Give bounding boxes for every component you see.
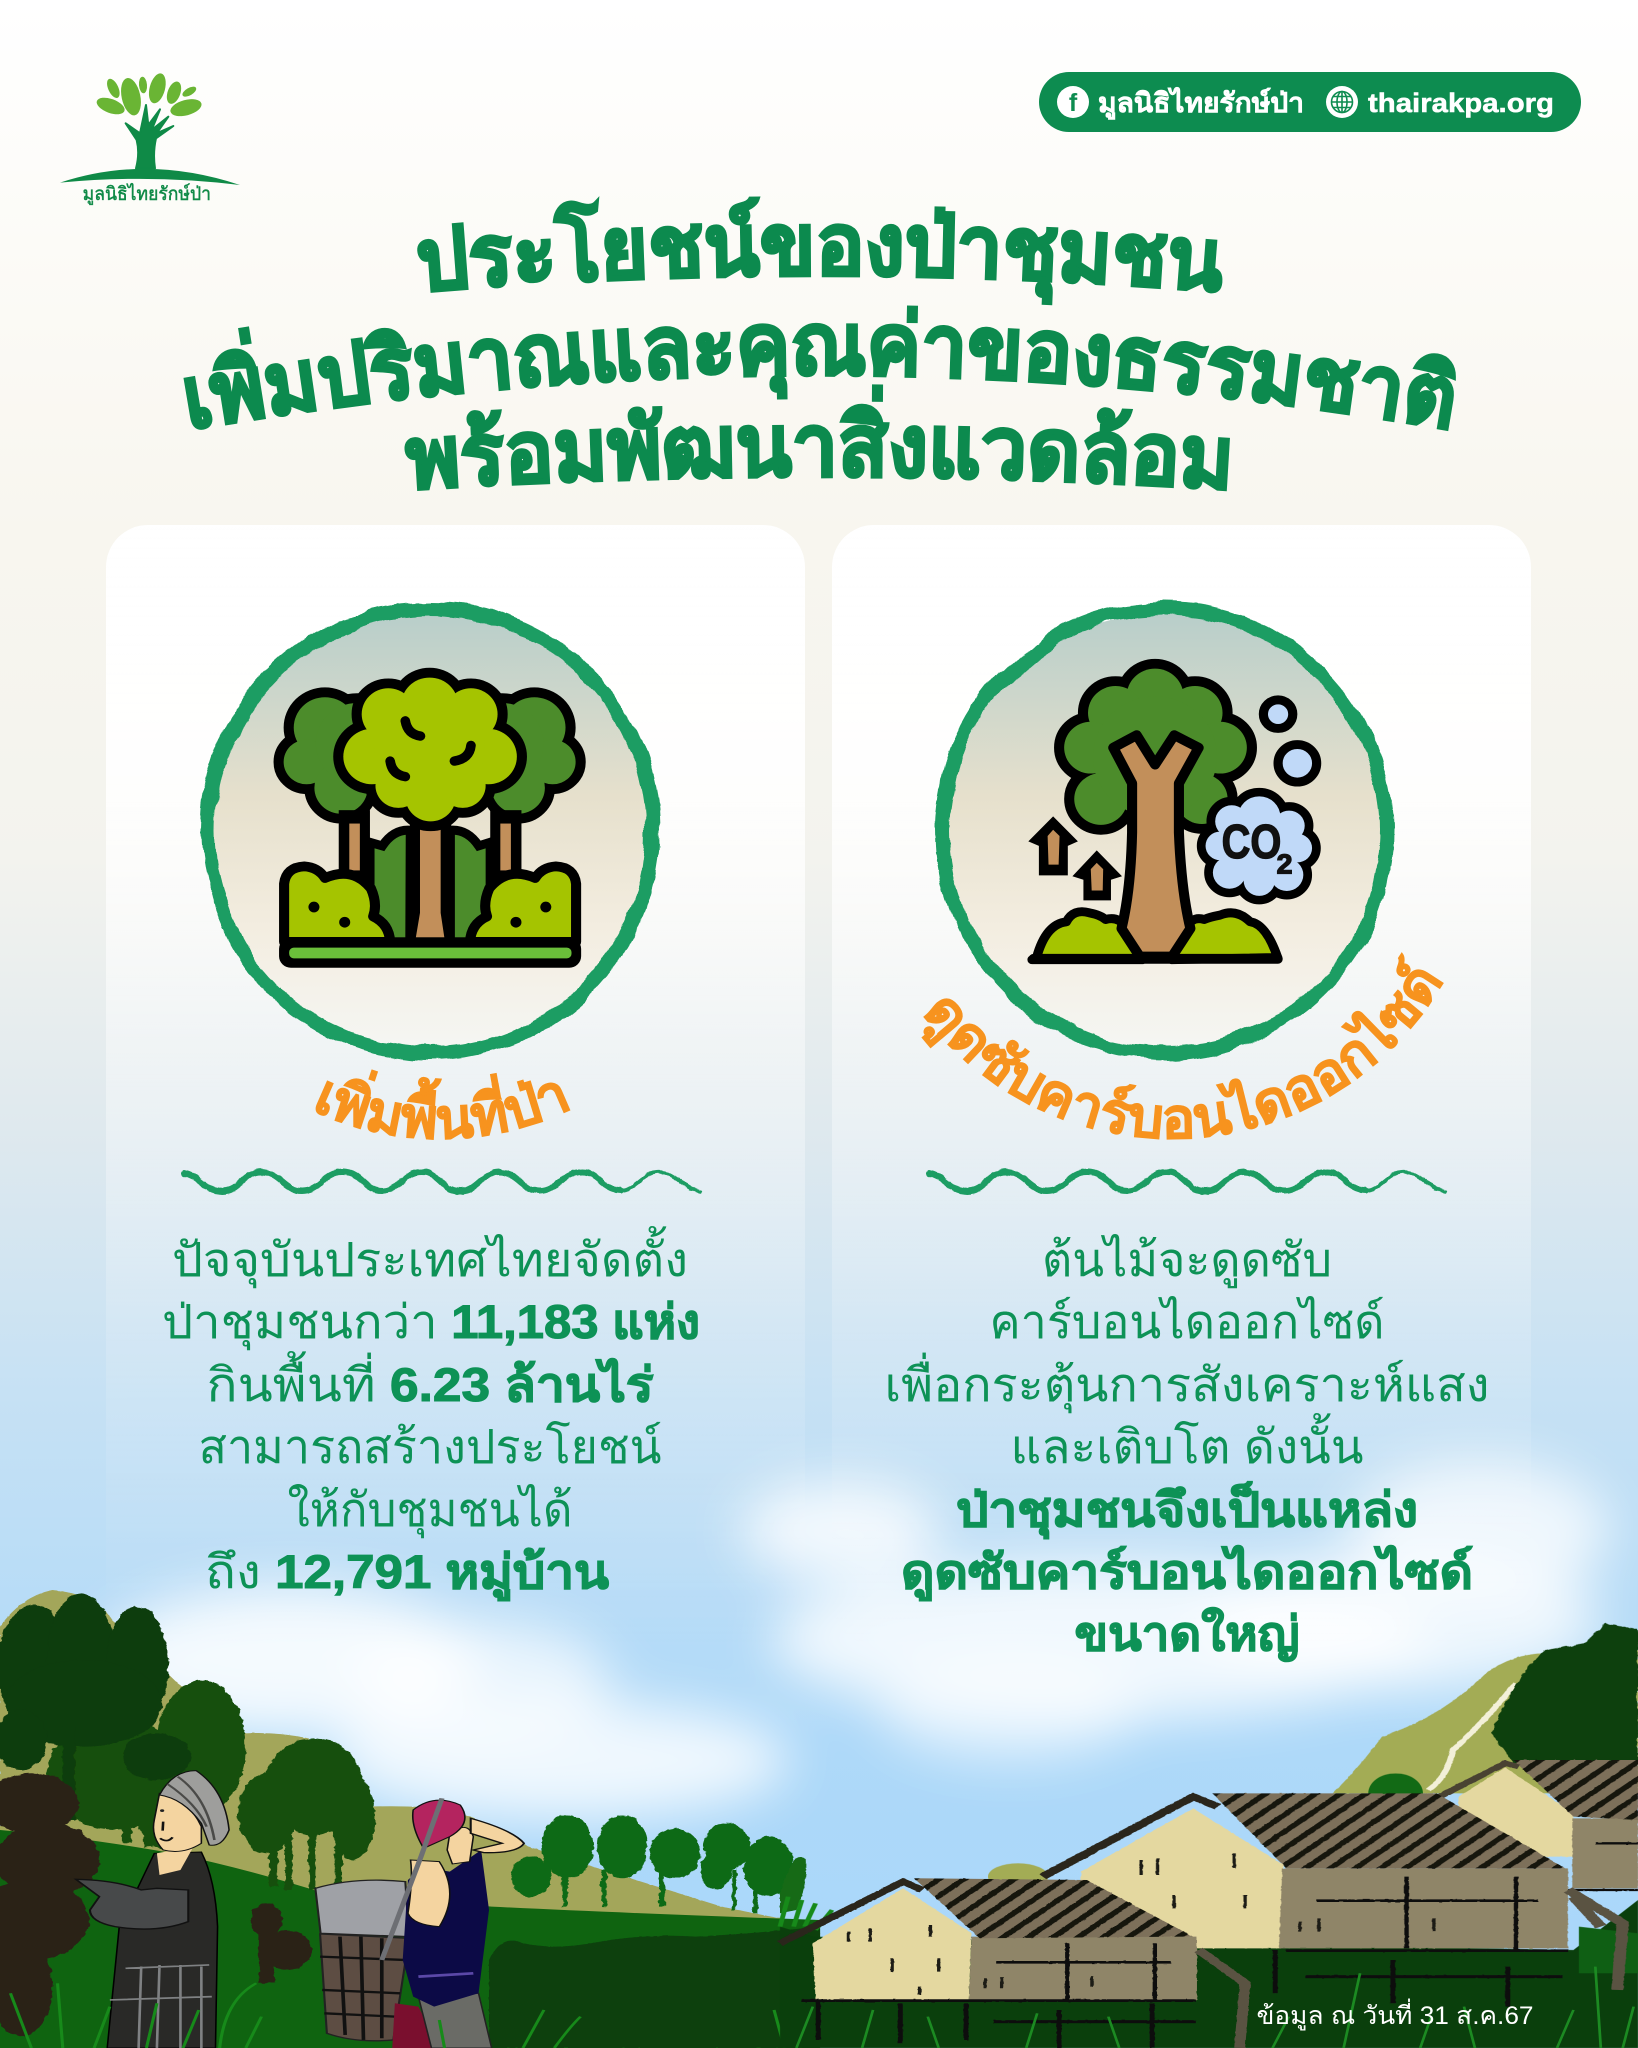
- body text right: และเติบโต ดังนั้น: [1010, 1413, 1364, 1473]
- ground: [780, 1900, 1638, 2048]
- dark foreground trees: [0, 1593, 191, 1820]
- icon: tree and CO2: [1028, 669, 1317, 964]
- subtitle: increase forest area: เพิ่มพื้นที่ป่า: [316, 1069, 570, 1140]
- body text left: ปัจจุบันประเทศไทยจัดตั้ง: [172, 1226, 688, 1289]
- villager two with basket: [315, 1798, 524, 2048]
- body text left: สามารถสร้างประโยชน์: [198, 1420, 662, 1473]
- body text right: ต้นไม้จะดูดซับ: [1042, 1233, 1332, 1289]
- icon: facebook: [1057, 86, 1089, 118]
- panel background right: [832, 525, 1531, 1645]
- body text left: ให้กับชุมชนได้: [288, 1483, 572, 1539]
- badge disc: [947, 613, 1383, 1049]
- row of mid trees: [511, 1815, 794, 1913]
- house back: [1439, 1760, 1638, 1890]
- dark bush ridge: [489, 1927, 820, 2048]
- villager one: [76, 1771, 229, 2048]
- body text left: กินพื้นที่ 6.23 ล้านไร่: [206, 1351, 654, 1411]
- logo leaves: [94, 72, 203, 119]
- panel: carbon absorption: [832, 525, 1531, 1662]
- logo: [60, 72, 240, 205]
- title line 3: พร้อมพัฒนาสิ่งแวดล้อม: [404, 384, 1230, 492]
- body text left: ถึง 12,791 หมู่บ้าน: [205, 1545, 609, 1602]
- icon: trees: [279, 678, 581, 968]
- waterfall stream: [1428, 1683, 1516, 1790]
- wave divider: [929, 1172, 1446, 1192]
- olive hills: [0, 1590, 820, 2048]
- landscape: right mountain and village houses: [780, 1623, 1638, 2048]
- panel background left: [106, 525, 805, 1645]
- foreground grass: [796, 1967, 1634, 2048]
- body text right: คาร์บอนไดออกไซด์: [990, 1295, 1384, 1348]
- grass slope: [0, 1830, 820, 2048]
- body text right: ป่าชุมชนจึงเป็นแหล่ง: [956, 1480, 1418, 1539]
- logo name: มูลนิธิไทยรักษ์ป่า: [83, 183, 211, 205]
- house front: [780, 1878, 1245, 2048]
- logo ground arc: [60, 169, 240, 185]
- badge disc: [212, 613, 648, 1049]
- dark mountain trees: [1491, 1623, 1638, 1763]
- icon: forest badge: [208, 609, 652, 1053]
- house middle: [1043, 1793, 1623, 2007]
- badge brush ring: [943, 609, 1387, 1053]
- panel: increase forest area: [106, 525, 805, 1602]
- back forest: [47, 1680, 375, 1890]
- foreground grass: [10, 1983, 816, 2048]
- facebook name: มูลนิธิไทยรักษ์ป่า: [1098, 87, 1304, 120]
- CO2 label: 2: [1277, 849, 1292, 879]
- header contact pill: [1039, 72, 1581, 132]
- CO2 label: CO: [1222, 816, 1281, 869]
- landscape: left hills, forest and villagers: [0, 1590, 820, 2048]
- body text right: [884, 1233, 1490, 1662]
- body text right: ขนาดใหญ่: [1074, 1606, 1300, 1662]
- body text left: ป่าชุมชนกว่า 11,183 แห่ง: [162, 1295, 700, 1351]
- title: [184, 196, 1456, 492]
- small tree and hillocks: [1368, 1773, 1423, 1813]
- icon: facebook: f: [1069, 89, 1078, 117]
- title line 1: ประโยชน์ของป่าชุมชน: [417, 196, 1222, 306]
- body text right: ดูดซับคาร์บอนไดออกไซด์: [901, 1544, 1473, 1602]
- icon: globe: [1326, 86, 1358, 118]
- title line 2: เพิ่มปริมาณและคุณค่าของธรรมชาติ: [184, 306, 1456, 432]
- olive mountain: [1333, 1643, 1638, 1793]
- wave divider: [184, 1172, 701, 1192]
- brown bush: [0, 1773, 311, 2037]
- clouds: [100, 1460, 1610, 1820]
- body text left: [162, 1226, 700, 1602]
- subtitle: carbon dioxide absorption: ดูดซับคาร์บอนไดออกไซด์: [922, 952, 1444, 1140]
- logo hand trunk: [126, 105, 173, 168]
- badge brush ring: [208, 609, 652, 1053]
- website: thairakpa.org: [1368, 88, 1554, 118]
- icon: carbon badge: [943, 609, 1387, 1053]
- body text right: เพื่อกระตุ้นการสังเคราะห์แสง: [884, 1352, 1490, 1414]
- source note: ข้อมูล ณ วันที่ 31 ส.ค.67: [1256, 1998, 1534, 2031]
